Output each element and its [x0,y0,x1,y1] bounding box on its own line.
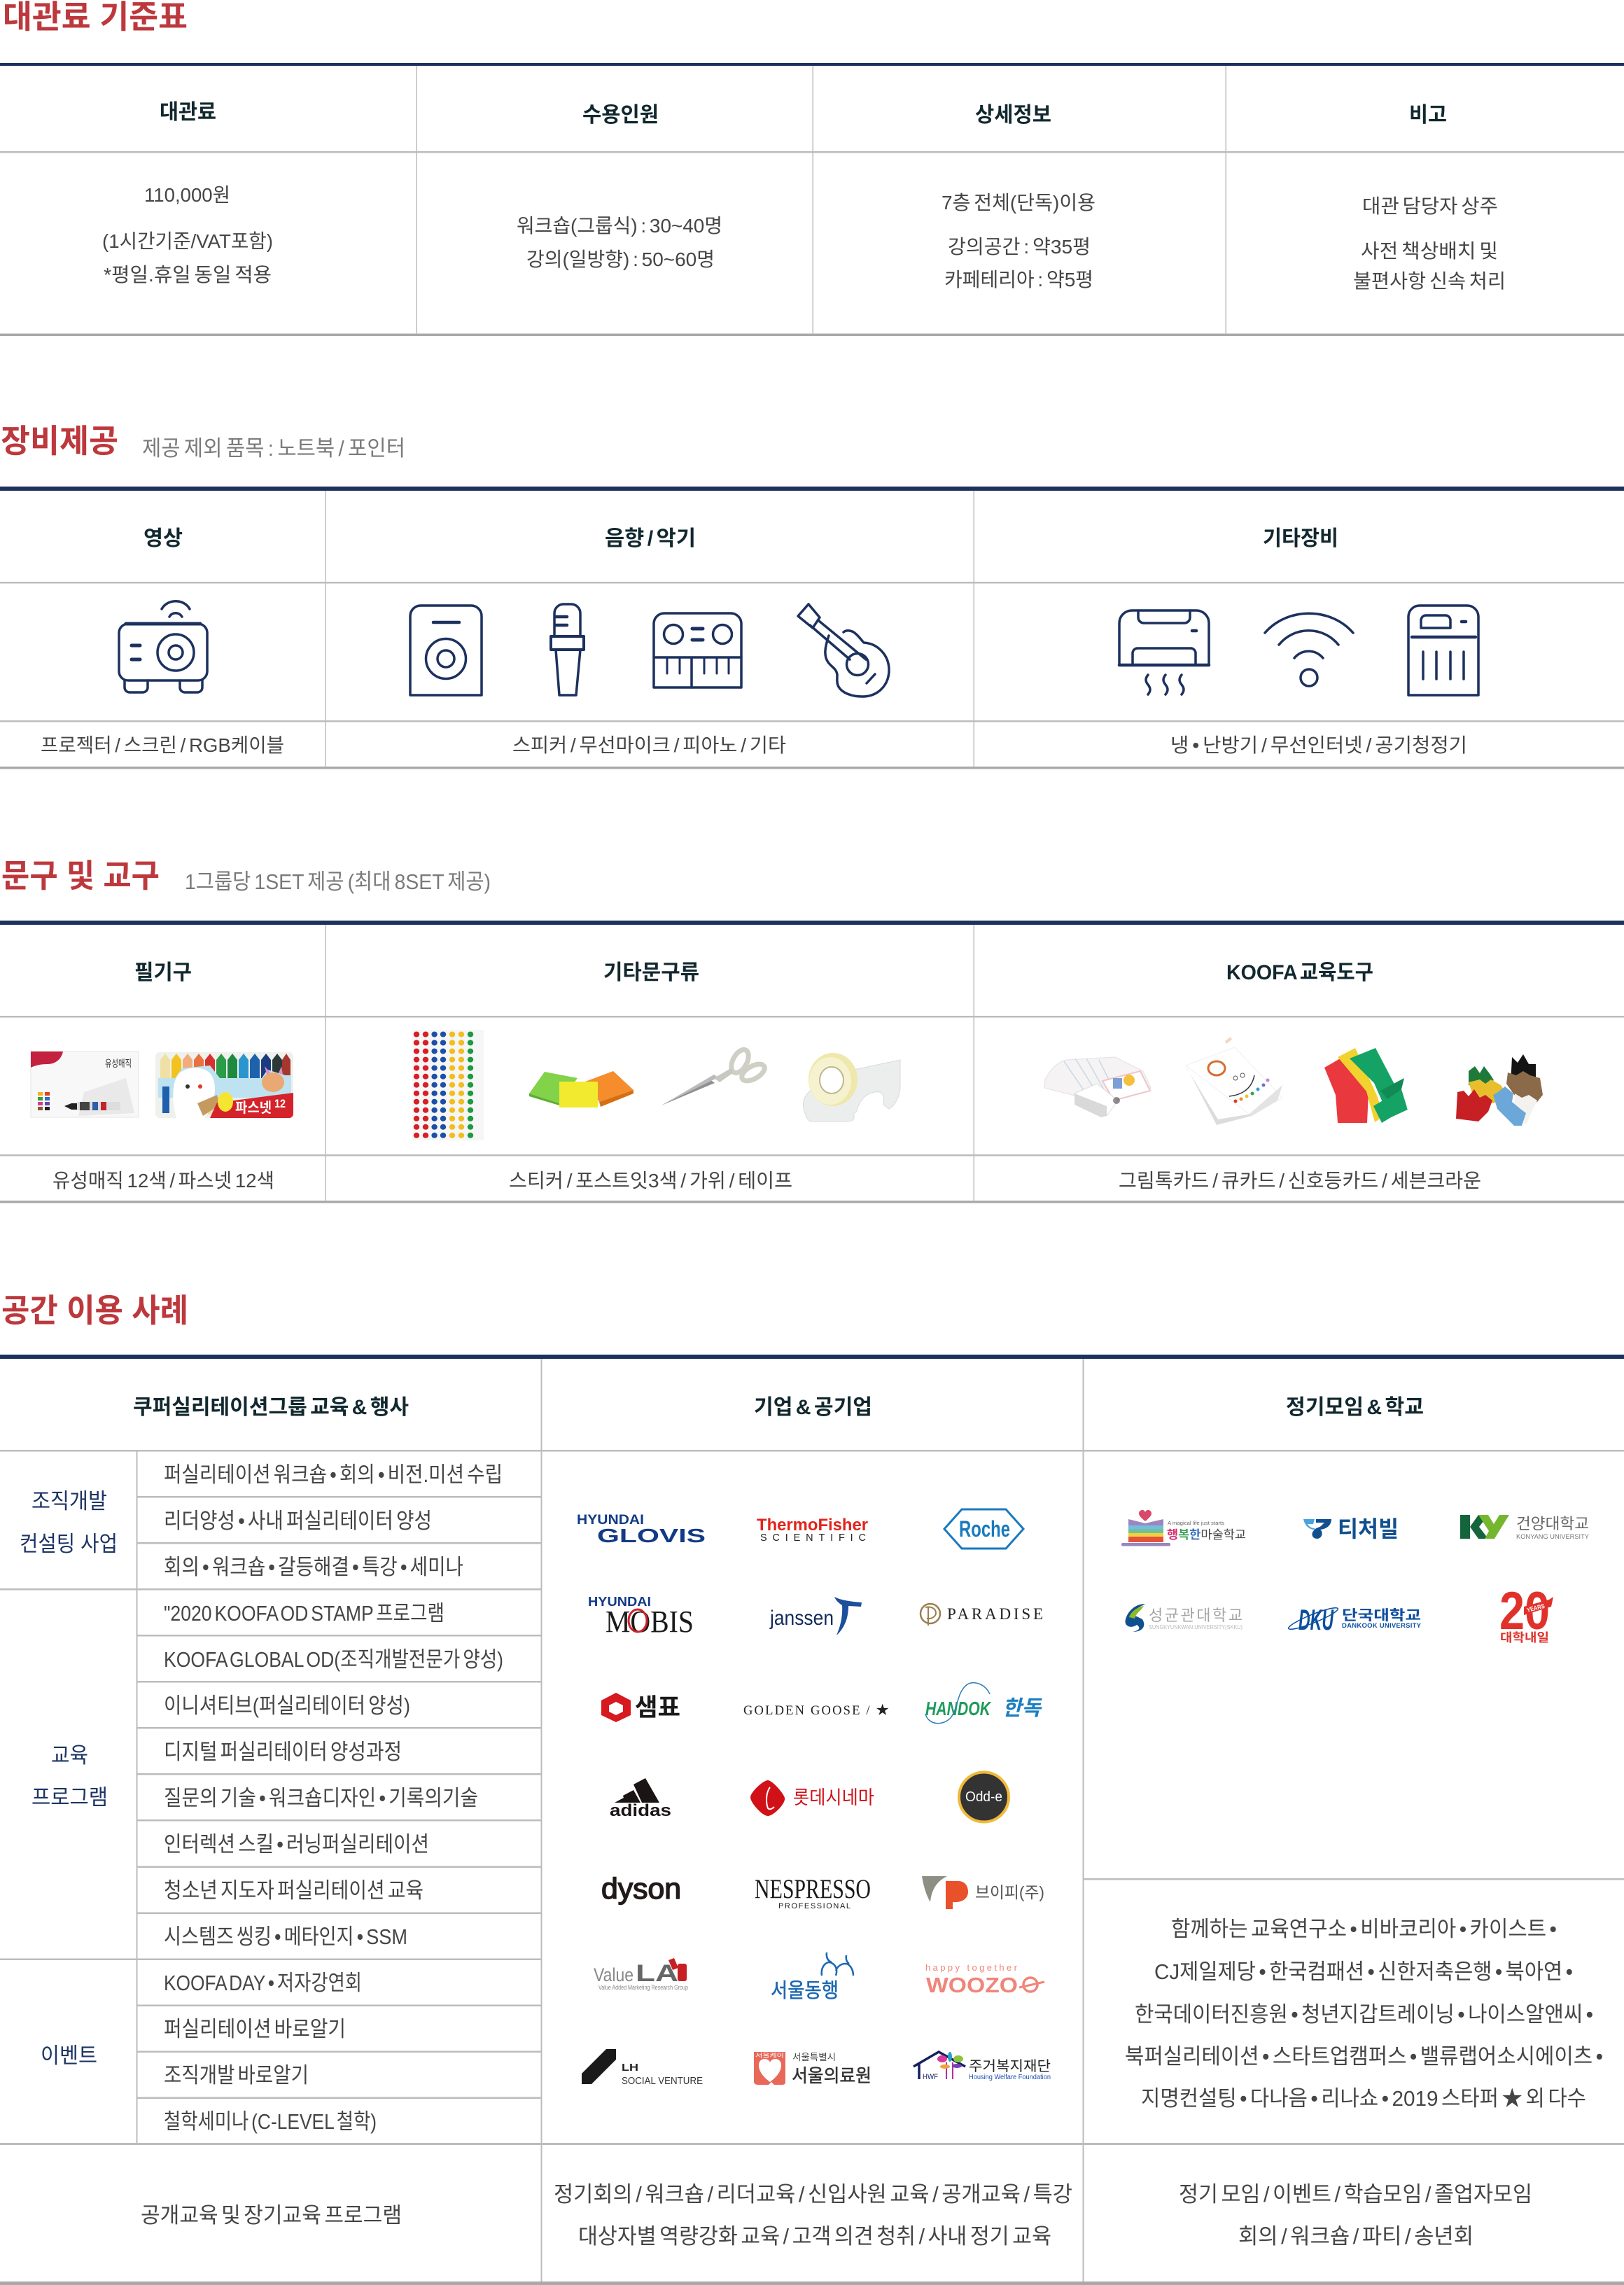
column: capacity: 수용인원 [582,104,659,127]
logo: Teacherville: 티처빌 [1338,1516,1399,1542]
logo: Thermo Fisher: ThermoFisher [757,1516,868,1535]
logo: Handok [925,1683,1042,1724]
heading: stationery: 문구 및 교구 [1,858,160,894]
column: details: 강의공간 : 약35평 [948,236,1091,258]
logo: Janssen: janssen [769,1607,834,1630]
column: details: 카페테리아 : 약5평 [944,269,1093,291]
icon: speaker [410,606,482,695]
image: oil marker box [31,1051,139,1117]
bottom row: public programs: 공개교육 및 장기교육 프로그램 [141,2203,402,2228]
logo: Woozoo: happy together [925,1962,1018,1973]
logo: Sungkyunkwan University: 성균관대학교 [1149,1607,1242,1624]
stationery captions: 그림톡카드 / 큐카드 / 신호등카드 / 세븐크라운 [1119,1170,1481,1192]
icon: guitar [798,604,889,697]
image: oil marker box: 유성매직 [105,1058,132,1069]
icon: wifi [1265,613,1353,686]
program list: 청소년 지도자 퍼실리테이션 교육 [164,1878,424,1903]
program list: 퍼실리테이션 워크숍 • 회의 • 비전.미션 수립 [164,1462,503,1487]
logo: Housing Welfare Foundation [913,2052,1051,2081]
column: notes: 불편사항 신속 처리 [1353,270,1506,292]
logo: Housing Welfare Foundation: HWF [923,2073,938,2081]
category labels: 조직개발 [31,1489,107,1514]
table headers: 영상 [144,527,183,550]
logo: Konyang University: 건양대학교 [1516,1515,1589,1532]
panel: space use cases [0,1292,1624,2285]
logo: dyson: dyson [601,1872,681,1905]
partner organisations list: 지명컨설팅 • 다나음 • 리나쇼 • 2019 스타퍼 ★ 외 다수 [1141,2086,1586,2111]
equipment captions: 프로젝터 / 스크린 / RGB케이블 [41,734,284,756]
program list: "2020 KOOFA OD STAMP 프로그램 [164,1601,444,1626]
partner organisations list: 한국데이터진흥원 • 청년지갑트레이닝 • 나이스알앤씨 • [1135,2002,1593,2027]
table headers: KOOFA 교육도구 [1226,961,1373,984]
heading: equipment: 장비제공 [1,423,118,459]
logo: Woozoo [925,1962,1044,1997]
logo: Teacherville [1303,1516,1399,1542]
category labels: 컨설팅 사업 [20,1532,118,1556]
image: picture talk cards [1044,1057,1151,1117]
logo: Hyundai Mobis [588,1595,694,1639]
image: tape dispenser [803,1053,900,1121]
logo: Seoul Medical Center: 서울케어 [755,2052,784,2059]
logo: Seoul companion: 서울동행 [771,1979,839,2002]
column: fee: 110,000원 [144,184,230,206]
logo: Housing Welfare Foundation: 주거복지재단 [969,2058,1051,2074]
logo: LH Social Venture: SOCIAL VENTURE [622,2076,703,2087]
bottom row: corporate uses: 대상자별 역량강화 교육 / 고객 의견 청취 / 사내 정기 교육 [578,2224,1051,2249]
column: notes: 사전 책상배치 및 [1361,240,1498,262]
partner organisations list: 함께하는 교육연구소 • 비바코리아 • 카이스트 • [1171,1917,1557,1941]
logo: Hyundai Glovis: HYUNDAI [577,1513,644,1528]
column: capacity: 강의(일방향) : 50~60명 [526,249,715,270]
logo: Dankook University: DKU [1298,1603,1334,1636]
program list: 디지털 퍼실리테이터 양성과정 [164,1740,402,1764]
logo: Lotte Cinema [750,1780,874,1816]
logo: adidas [610,1778,671,1820]
logo: LH Social Venture: LH [622,2062,638,2074]
logo: VP: 브이피(주) [975,1883,1044,1901]
logo: Hyundai Glovis [577,1513,706,1546]
table headers: 필기구 [134,961,192,984]
logo: Seoul Medical Center: 서울의료원 [792,2065,872,2086]
column: notes [1353,104,1506,292]
image: colour dot stickers [412,1030,484,1140]
column: fee: (1시간기준/VAT포함) [102,230,273,252]
program list: 질문의 기술 • 워크숍디자인 • 기록의기술 [164,1786,478,1810]
logo: LH Social Venture [582,2049,703,2087]
table headers: 기타장비 [1263,527,1338,550]
logo: Magic school [1121,1510,1246,1546]
logo: Odd-e: Odd-e [965,1789,1002,1805]
logo: University Tomorrow 20 years: 대학내일 [1500,1631,1549,1644]
column: details: 상세정보 [975,104,1051,127]
equipment captions: 냉 • 난방기 / 무선인터넷 / 공기청정기 [1170,734,1467,756]
logo: VP [922,1876,1044,1909]
panel: rental fee table [0,0,1624,336]
category labels [20,1489,118,2068]
program list: 인터렉션 스킬 • 러닝퍼실리테이션 [164,1832,429,1857]
image: pastel crayon box: 12 [274,1097,286,1110]
stationery captions: 유성매직 12색 / 파스넷 12색 [52,1170,274,1192]
image: pastel crayon box: 파스넷 [235,1100,272,1116]
column: fee: *평일.휴일 동일 적용 [104,264,272,286]
logo: Woozoo: WOOZO [926,1973,1018,1997]
table headers: 쿠퍼실리테이션그룹 교육 & 행사 [133,1396,409,1419]
column: notes: 대관 담당자 상주 [1362,195,1498,217]
subheading: excluded items: 제공 제외 품목 : 노트북 / 포인터 [142,436,405,461]
icon: microphone [551,604,584,695]
logo: Dankook University [1287,1603,1422,1636]
program list: 이니셔티브(퍼실리테이터 양성) [164,1693,410,1718]
logo: Handok: 한독 [1002,1697,1042,1720]
icon: keyboard [654,613,741,687]
logo: Janssen [769,1597,862,1635]
icon: air purifier [1408,606,1478,695]
category labels: 이벤트 [41,2043,97,2068]
partner organisations list: CJ제일제당 • 한국컴패션 • 신한저축은행 • 북아연 • [1154,1959,1573,1984]
logo: Sempio [601,1693,680,1722]
image: question cards [1186,1037,1282,1125]
stationery captions [52,1170,1481,1192]
logo: Nespresso: PROFESSIONAL [778,1902,850,1910]
table headers: 기업 & 공기업 [754,1396,872,1419]
logo: Lotte Cinema: 롯데시네마 [793,1787,874,1808]
logo: Paradise [920,1604,1043,1626]
logo: Roche: Roche [959,1516,1010,1542]
heading: use cases: 공간 이용 사례 [1,1292,188,1329]
bottom row: corporate uses [554,2182,1072,2249]
logo: Odd-e [959,1773,1009,1822]
icon: air conditioner [1119,610,1209,694]
column: fee [102,101,273,286]
logo: Paradise: PARADISE [947,1605,1043,1623]
logo: Roche [944,1509,1023,1549]
program list: 퍼실리테이션 바로알기 [164,2017,346,2041]
logo: University Tomorrow 20 years: YEARS [1526,1602,1546,1614]
logo: ValueLAB: LA [636,1960,678,1987]
logo: Magic school: A magical life just starts [1168,1521,1225,1526]
logo: Dankook University: DANKOOK UNIVERSITY [1342,1622,1422,1630]
column: details: 7층 전체(단독)이용 [941,192,1096,214]
logo: Nespresso [755,1874,871,1910]
column: capacity [517,104,722,270]
partner organisations list [1125,1917,1603,2111]
program list: KOOFA DAY • 저자강연회 [164,1971,362,1995]
logo: University Tomorrow 20 years: 20 [1499,1581,1550,1641]
image: scissors [662,1047,767,1105]
equipment captions: 스피커 / 무선마이크 / 피아노 / 기타 [512,734,786,756]
column: details [941,104,1096,291]
icon: projector [119,601,207,692]
category labels: 교육 [51,1743,88,1768]
table headers [133,1396,1424,1419]
table headers [144,527,1338,550]
program list: 리더양성 • 사내 퍼실리테이터 양성 [164,1509,432,1533]
logo: Seoul companion [771,1952,853,2002]
table headers [134,961,1373,984]
logo: Hyundai Mobis: HYUNDAI [588,1595,651,1609]
panel: stationery and teaching tools [0,858,1624,1203]
logo: Hyundai Mobis: MOBIS [606,1605,694,1639]
stationery captions: 스티커 / 포스트잇3색 / 가위 / 테이프 [509,1170,792,1192]
logo: Thermo Fisher [757,1516,868,1544]
bottom row: corporate uses: 정기회의 / 워크숍 / 리더교육 / 신입사원 교육 / 공개교육 / 특강 [554,2182,1072,2207]
image: seven crowns [1456,1054,1543,1126]
logo: ValueLAB: Value [594,1964,634,1985]
logo: Sungkyunkwan University: SUNGKYUNKWAN UNIVERSITY(SKKU) [1149,1624,1242,1630]
table headers: 정기모임 & 학교 [1286,1396,1424,1419]
logo: Konyang University: KONYANG UNIVERSITY [1516,1533,1590,1541]
program list: 시스템즈 씽킹 • 메타인지 • SSM [164,1924,407,1949]
subheading: set limit: 1그룹당 1SET 제공 (최대 8SET 제공) [185,869,491,894]
image: pastel crayon box [155,1052,293,1118]
logo: Seoul Medical Center [754,2052,872,2086]
logo: Thermo Fisher: SCIENTIFIC [760,1532,866,1544]
program list: 조직개발 바로알기 [164,2063,309,2088]
logo: Nespresso: NESPRESSO [755,1874,871,1904]
logo: Golden Goose: GOLDEN GOOSE / ★ [743,1704,889,1718]
column: capacity: 워크숍(그룹식) : 30~40명 [517,215,722,237]
panel: equipment [0,423,1624,769]
bottom row: meetings and schools uses: 정기 모임 / 이벤트 / 학습모임 / 졸업자모임 [1179,2182,1532,2207]
category labels: 프로그램 [31,1785,108,1810]
program list [164,1462,503,2134]
logo: Housing Welfare Foundation: Housing Welfare Foundation [969,2074,1051,2081]
logo: Konyang University [1460,1515,1590,1541]
logo: Sungkyunkwan University [1125,1604,1242,1632]
program list: KOOFA GLOBAL OD(조직개발전문가 양성) [164,1647,503,1672]
image: sticky notes [529,1071,634,1107]
logo: Handok: HANDOK [925,1698,991,1719]
program list: 회의 • 워크숍 • 갈등해결 • 특강 • 세미나 [164,1555,463,1579]
program list: 철학세미나 (C-LEVEL 철학) [164,2109,377,2134]
logo: adidas: adidas [610,1801,671,1820]
image: signal cards [1324,1048,1408,1123]
logo: ValueLAB [594,1958,688,1991]
logo: Sempio: 샘표 [635,1694,680,1721]
equipment captions [41,734,1467,756]
logo: Dankook University: 단국대학교 [1342,1607,1421,1623]
column: fee: 대관료 [160,101,216,124]
bottom row: meetings and schools uses [1179,2182,1532,2249]
column: notes: 비고 [1409,104,1447,127]
bottom row: meetings and schools uses: 회의 / 워크숍 / 파티 / 송년회 [1238,2224,1474,2249]
logo: ValueLAB: Value Added Marketing Research Group [598,1984,688,1991]
table headers: 기타문구류 [603,961,699,984]
logo: Magic school: 행복한마술학교 [1167,1528,1246,1542]
logo: Seoul Medical Center: 서울특별시 [792,2052,836,2062]
logo: Hyundai Glovis: GLOVIS [597,1525,706,1546]
table headers: 음향 / 악기 [605,527,696,550]
partner organisations list: 북퍼실리테이션 • 스타트업캠퍼스 • 밸류랩어소시에이츠 • [1125,2044,1603,2069]
